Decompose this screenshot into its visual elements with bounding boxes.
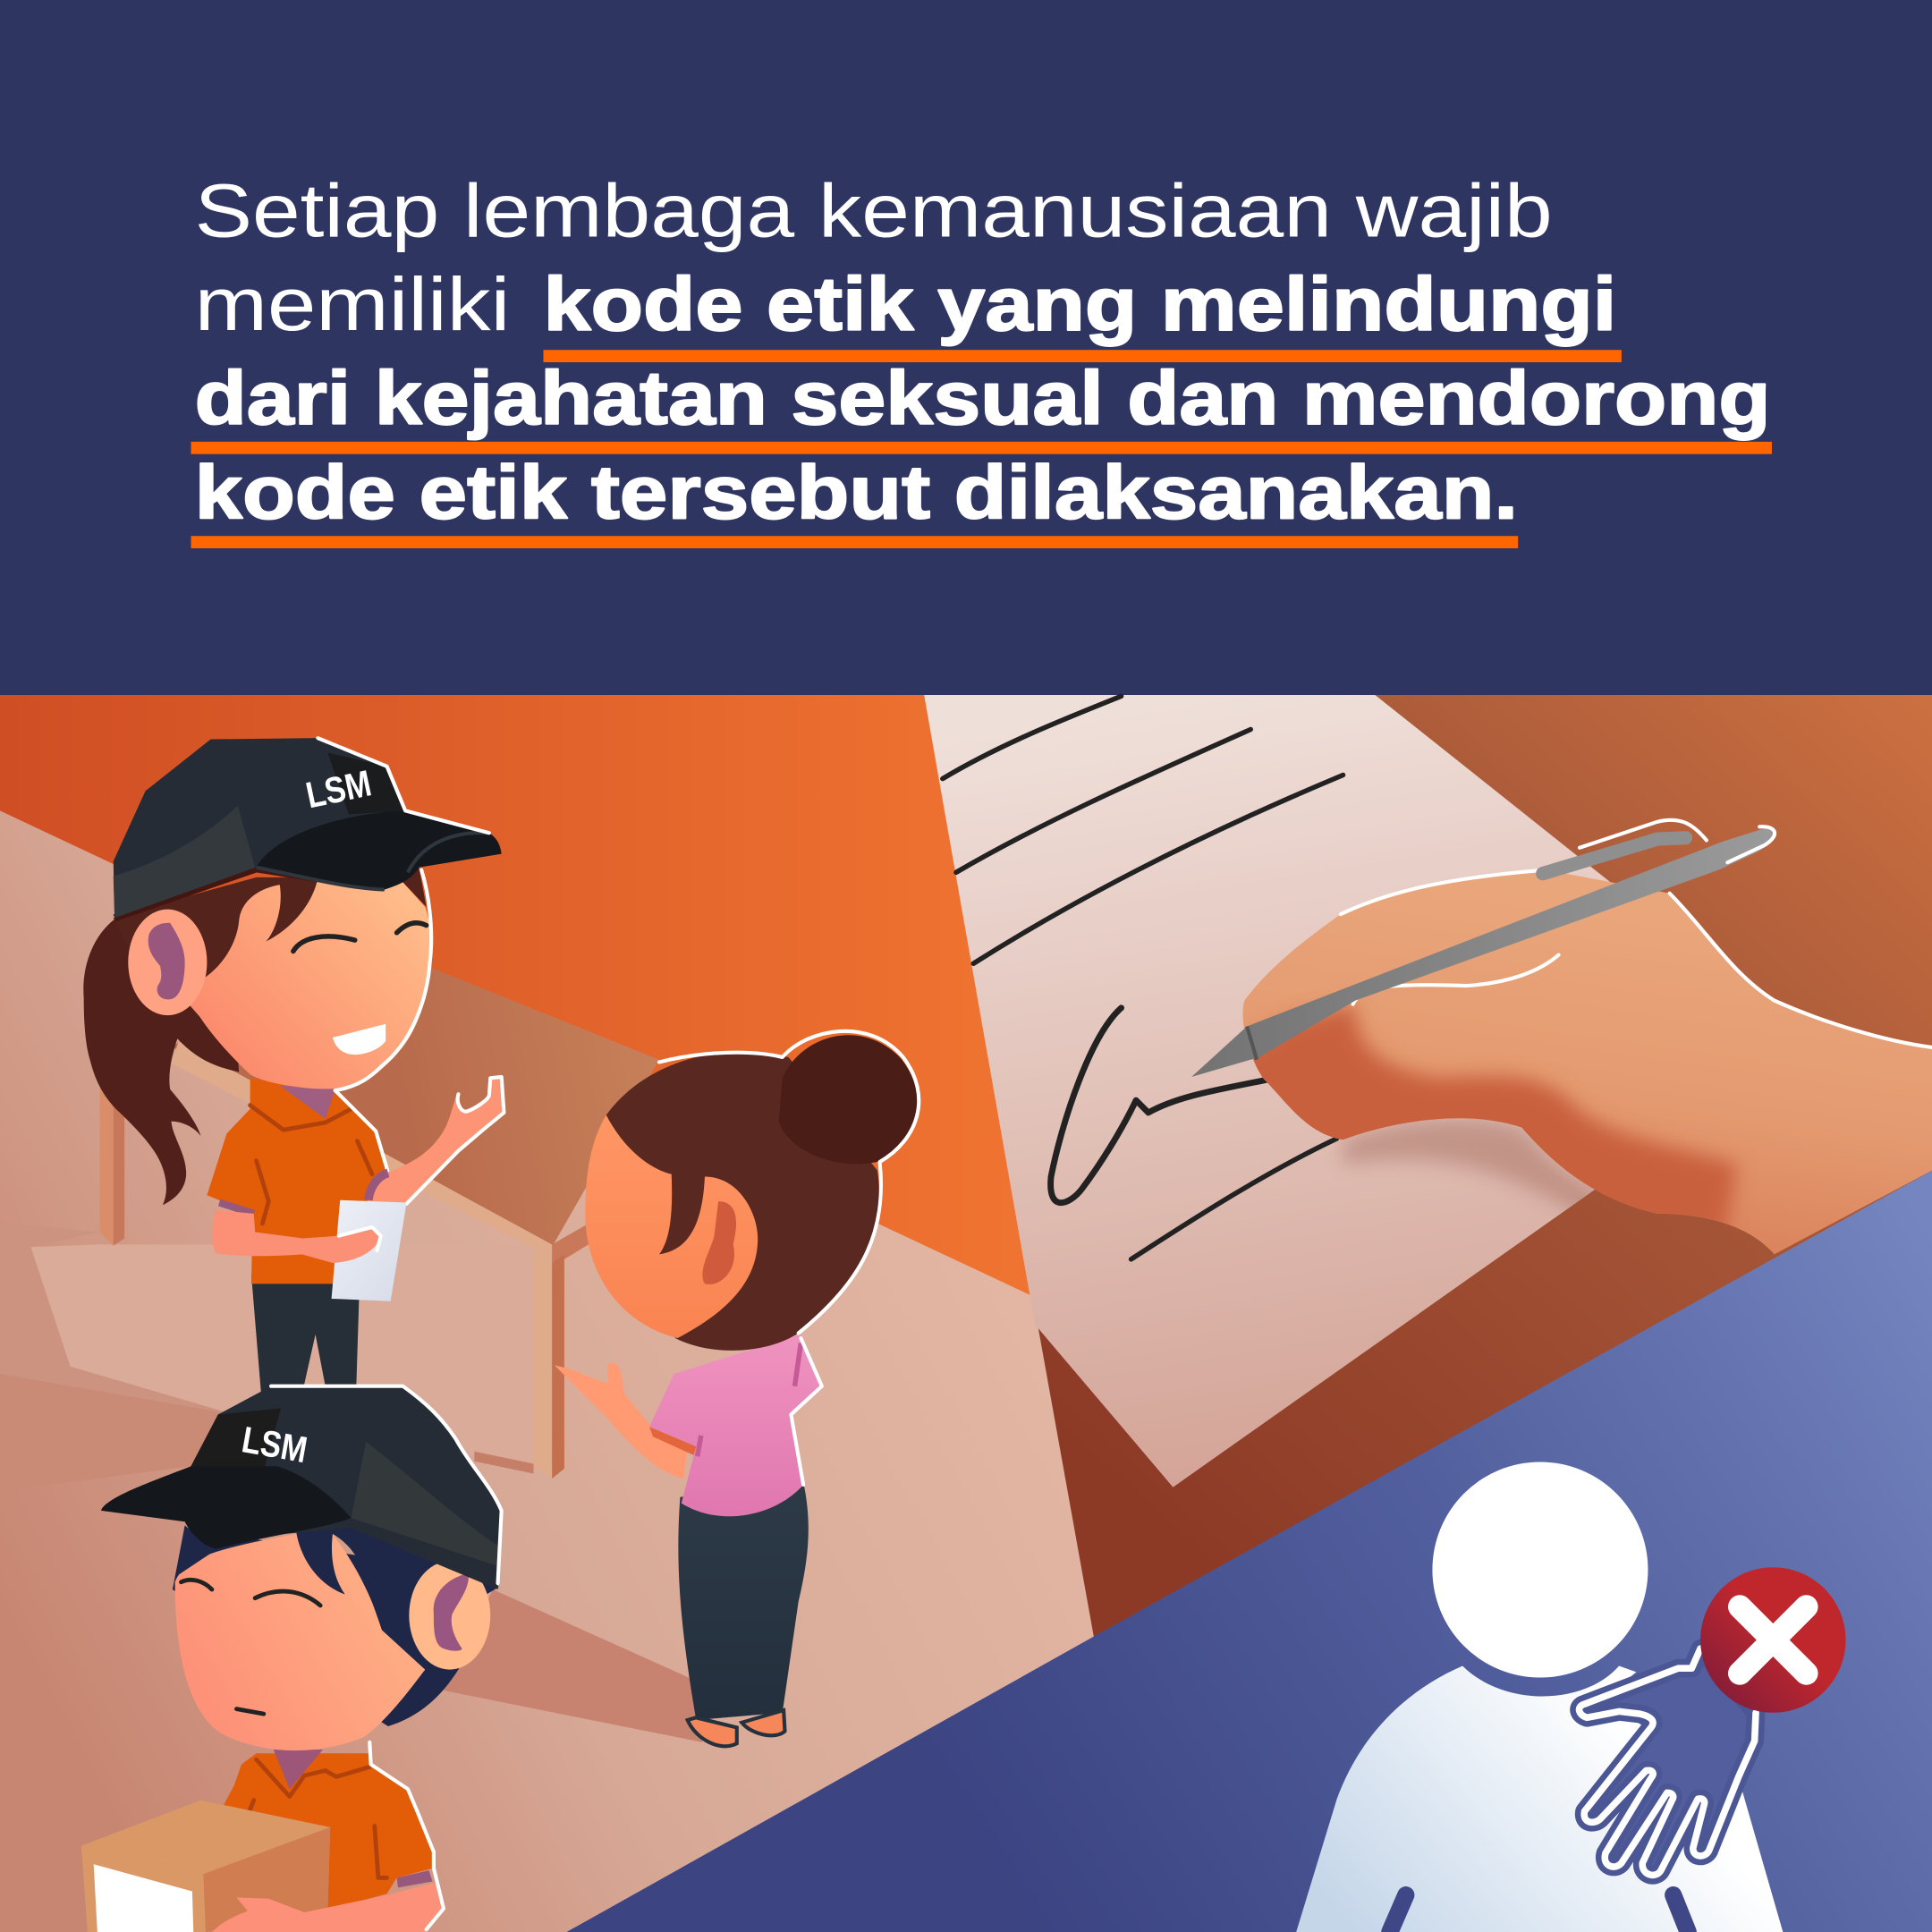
ear [409,1561,490,1670]
pink shirt [649,1335,822,1516]
arm lines [1390,1895,1688,1932]
cap [101,1386,502,1589]
eyes [293,923,427,951]
ear [702,1201,736,1284]
worker with box [81,1386,502,1932]
head [114,868,431,1090]
floor shadow [444,1589,702,1742]
eyes and mouth [181,1580,320,1714]
arm [212,1883,444,1932]
table [100,924,659,1479]
hair back [173,1528,493,1726]
hair [114,877,318,1015]
person head [1432,1462,1648,1678]
hair [606,1053,879,1351]
orange wall [0,695,1035,1301]
cap logo LSM: LSM [239,1419,310,1470]
cap logo LSM: LSM [302,762,375,816]
trousers [251,1275,360,1394]
hair at temple [175,1525,216,1577]
headline line 2 regular: memiliki [195,262,510,346]
hair outline [659,1031,919,1334]
hand [1220,870,1932,1269]
face [585,1115,758,1338]
headline line 2 bold: kode etik yang melindungi [544,262,1616,346]
note paper [332,1200,407,1301]
trousers [678,1482,809,1720]
headline line 4: kode etik tersebut dilaksanakan. [195,450,1518,534]
shirt [223,1750,434,1910]
hair fringe [296,1515,499,1634]
document [924,695,1725,1487]
raised arm [368,1077,504,1204]
underlines [191,350,1772,548]
scene: office with workers [0,695,1097,1932]
arm [555,1363,688,1479]
text lines [943,696,1343,1259]
header panel [0,0,1932,695]
icon: person with unwanted hand [1296,1462,1846,1932]
sleeve cuff [369,1173,388,1200]
bun [779,1035,918,1164]
blue band panel [567,1171,1932,1932]
desk [924,695,1932,1639]
floor shading [0,1223,533,1491]
smile [333,1024,386,1055]
headline text [191,168,1772,548]
worker with cap and note [83,738,504,1394]
face outline [335,870,431,1090]
cap [114,738,502,918]
headline line 1: Setiap lembaga kemanusiaan wajib [195,168,1553,252]
holding arm [212,1210,381,1263]
shoes [688,1710,785,1746]
person body [1296,1665,1783,1932]
shirt [207,1078,387,1284]
headline line 3: dari kejahatan seksual dan mendorong [195,356,1771,440]
groping hand [1580,1648,1756,1875]
woman in pink seen from behind [555,1031,919,1746]
ear [128,910,207,1015]
shirt and arm outline [369,1742,444,1929]
pen [1191,820,1775,1077]
raised arm outline [407,1077,504,1204]
box [81,1801,330,1932]
signature [1051,1008,1269,1203]
icon: red cross badge [1700,1567,1846,1713]
head [175,1534,425,1750]
ponytail [83,911,239,1205]
scene: signing a document [924,695,1932,1639]
hand shadow on paper [1336,1118,1594,1213]
floor [0,810,1097,1932]
